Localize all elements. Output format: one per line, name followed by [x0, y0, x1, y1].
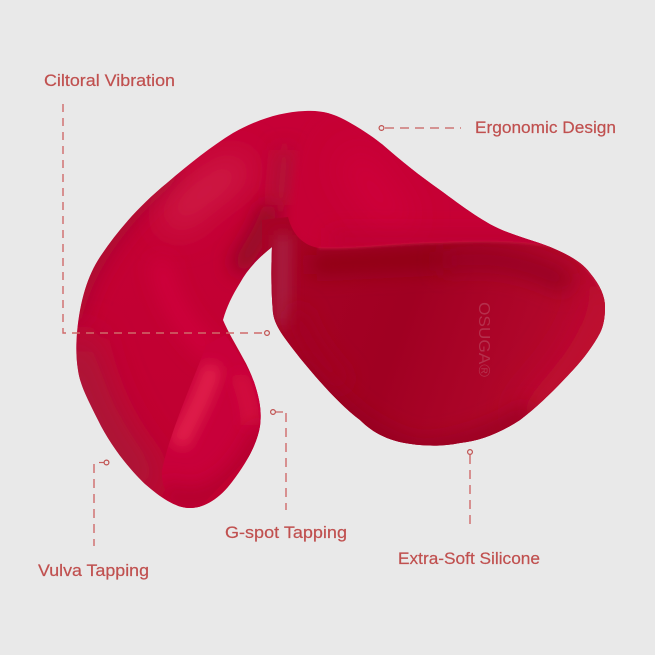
brand mark: OSUGA® — [475, 302, 492, 377]
front face — [262, 217, 605, 446]
arm shading — [70, 150, 285, 490]
top face shading — [322, 112, 554, 249]
infographic canvas — [38, 74, 615, 580]
callout: g-spot tapping — [225, 410, 347, 542]
callout: extra-soft silicone — [398, 450, 540, 568]
callout: g-spot tapping: G-spot Tapping — [225, 523, 347, 542]
callout: ergonomic design: Ergonomic Design — [475, 118, 616, 137]
tip shading — [162, 342, 261, 508]
callout: vulva tapping — [38, 460, 149, 580]
ridge highlight — [318, 240, 592, 276]
callout: extra-soft silicone: Extra-Soft Silicone — [398, 549, 540, 568]
callout: ergonomic design — [379, 118, 616, 137]
callout: clitoral vibration — [44, 71, 269, 335]
callout: clitoral vibration: Ciltoral Vibration — [44, 71, 175, 90]
product illustration — [76, 110, 605, 508]
callout: vulva tapping: Vulva Tapping — [38, 561, 149, 580]
